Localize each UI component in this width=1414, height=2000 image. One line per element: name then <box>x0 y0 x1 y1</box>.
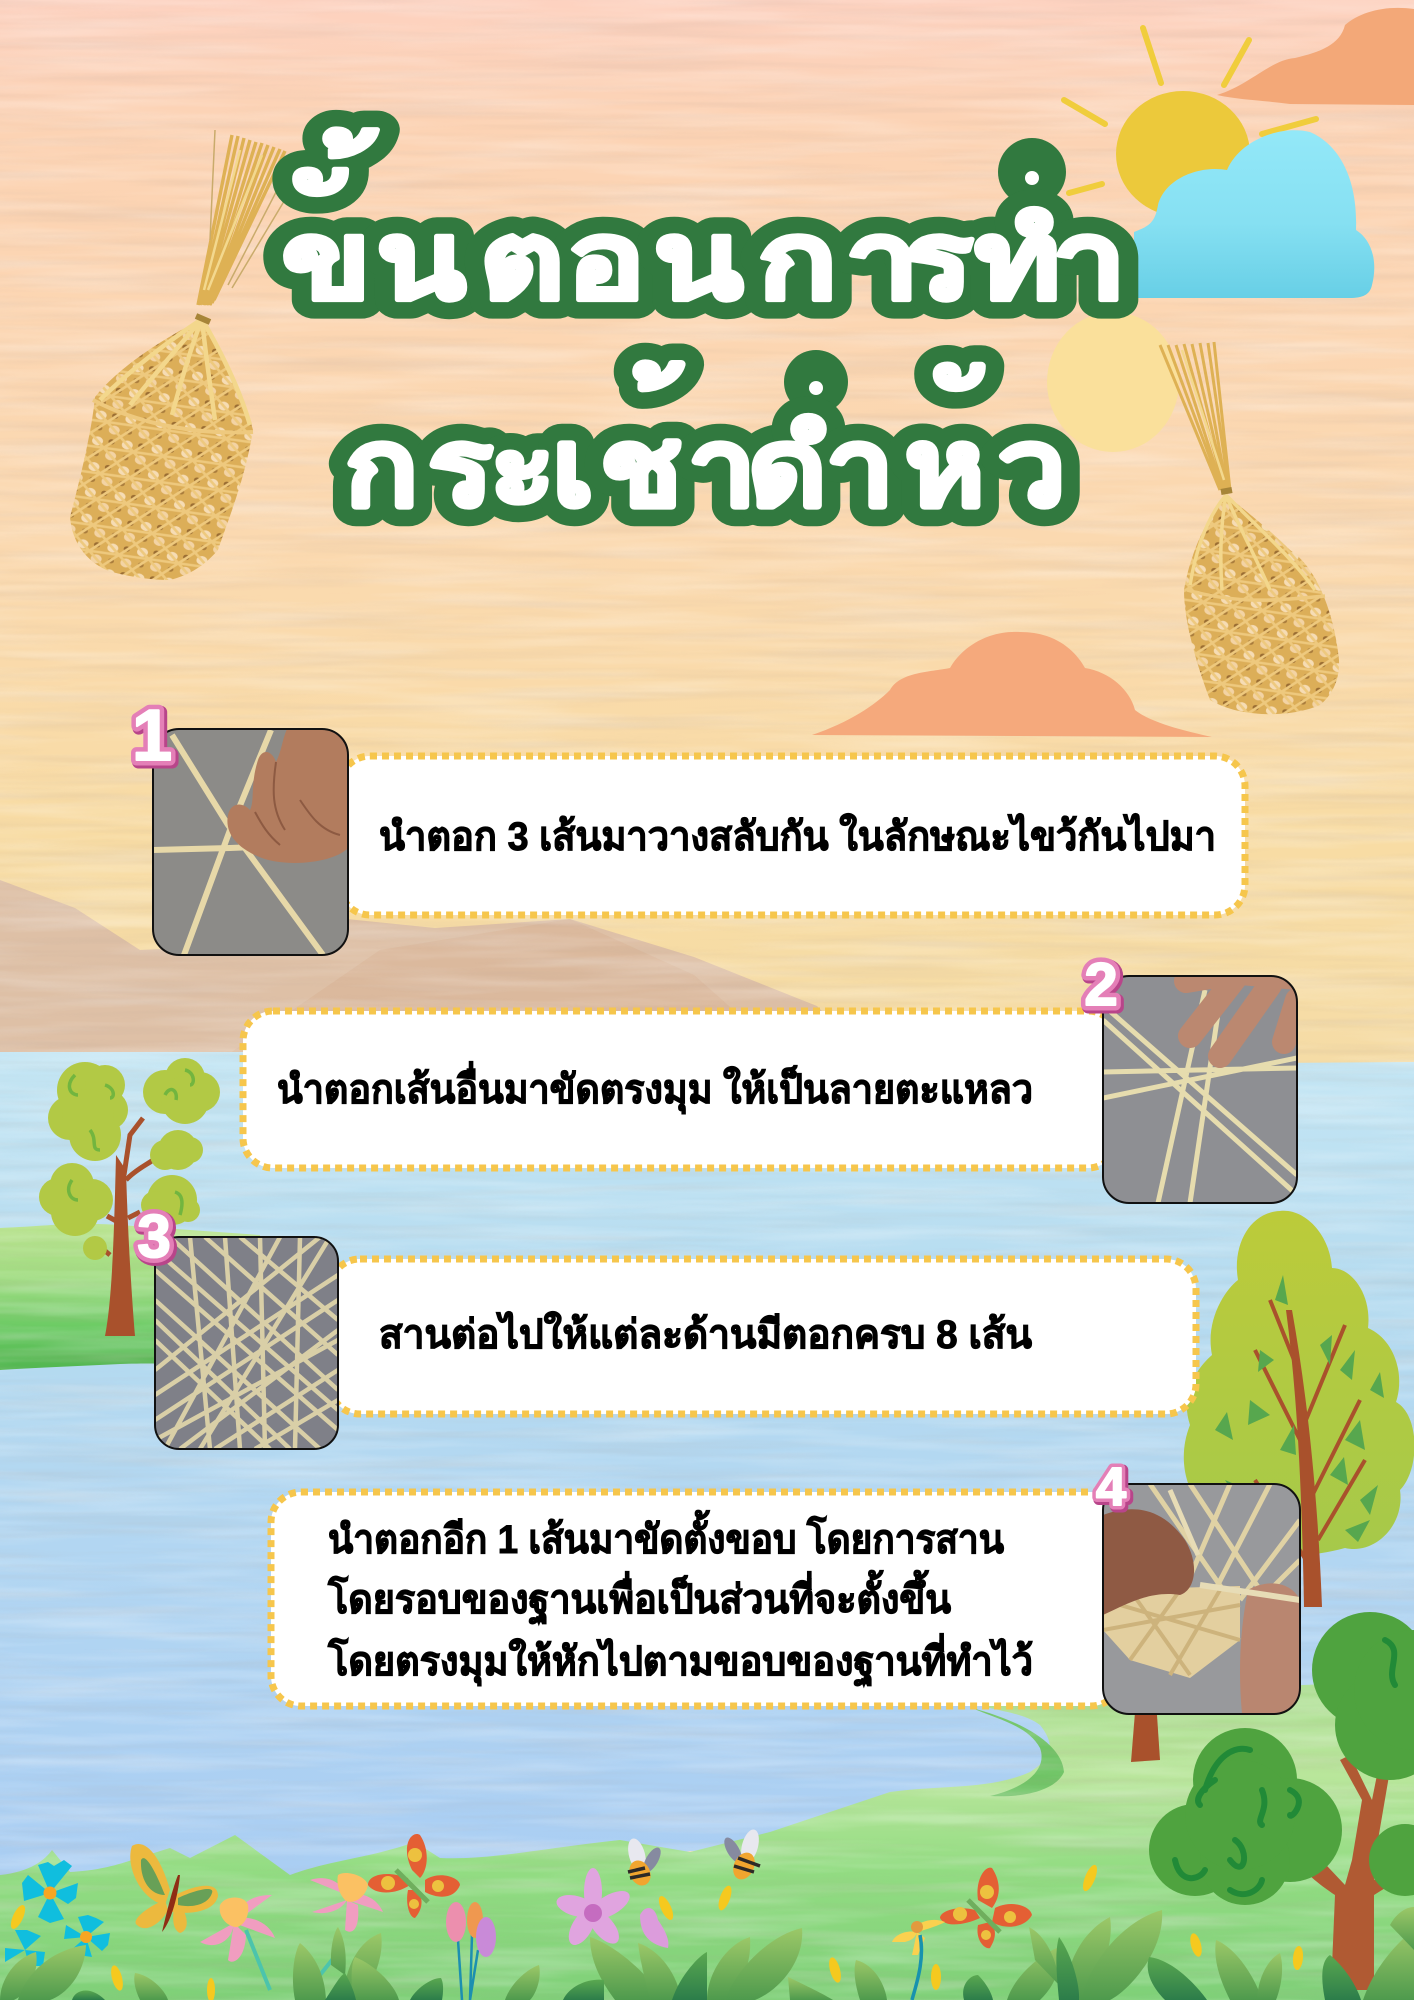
step 2 number badge: 2 <box>1084 951 1118 1018</box>
tree: bottom right trees <box>1149 1612 1414 1990</box>
step 2 text: นำตอกเส้นอื่นมาขัดตรงมุม ให้เป็นลายตะแหลว <box>277 1061 1033 1115</box>
icon: sun <box>1064 28 1316 217</box>
step 4 text <box>327 1510 1033 1688</box>
step 1 card <box>340 756 1245 915</box>
icon: bee left <box>625 1837 664 1889</box>
step 1 photo <box>153 729 348 955</box>
step 3 text: สานต่อไปให้แต่ละด้านมีตอกครบ 8 เส้น <box>379 1311 1032 1357</box>
step 4 text: โดยตรงมุมให้หักไปตามขอบของฐานที่ทำไว้ <box>327 1633 1033 1688</box>
title outline text: ขั้นตอนการทำ <box>282 129 1126 322</box>
step 3 number badge: 3 <box>139 1205 173 1272</box>
icon: orange cloud middle <box>812 632 1212 737</box>
step 3 panel <box>137 1203 1196 1449</box>
title white text <box>282 129 1126 529</box>
title outline text <box>282 129 1126 529</box>
step 3 number badge: 3 <box>137 1203 171 1270</box>
icon: orange butterfly 1 <box>368 1834 460 1918</box>
icon: tulips <box>446 1902 496 2000</box>
tree: small left tree <box>39 1058 220 1336</box>
step 3 card <box>330 1259 1196 1414</box>
step 4 panel <box>271 1457 1300 1714</box>
step 1 number badge: 1 <box>132 696 172 776</box>
tree trunk stub behind step 4 <box>1131 1700 1160 1762</box>
step 4 number badge: 4 <box>1096 1457 1126 1517</box>
background: sky <box>0 0 1414 1070</box>
icon: yellow daisy <box>892 1920 945 2000</box>
icon: blue flowers <box>5 1860 110 1966</box>
icon: pink flower 2 <box>300 1873 383 2000</box>
step 3 number badge: 3 <box>137 1203 171 1270</box>
title white text: กระเช้าดำหัว <box>345 361 1066 529</box>
step 4 number badge: 4 <box>1096 1457 1126 1517</box>
step 2 number badge: 2 <box>1084 951 1118 1018</box>
icon: yellow buds <box>8 1863 1304 2000</box>
background: lake edge brush <box>972 1708 1064 1796</box>
title ring dots <box>809 171 1039 395</box>
step 2 photo <box>1103 960 1297 1203</box>
step 1 text: นำตอก 3 เส้นมาวางสลับกัน ในลักษณะไขว้กันไปมา <box>379 813 1216 859</box>
step 4 number badge: 4 <box>1098 1459 1128 1519</box>
step 4 card <box>271 1492 1121 1706</box>
icon: right basket <box>1160 342 1339 714</box>
background: left grass bank <box>0 1224 260 1370</box>
bottom: flowers and insects <box>5 1828 1032 2000</box>
step 4 text: โดยรอบของฐานเพื่อเป็นส่วนที่จะตั้งขึ้น <box>327 1570 951 1626</box>
icon: blue cloud <box>1134 130 1374 298</box>
icon: purple flower <box>554 1868 634 1949</box>
icon: orange butterfly 2 <box>940 1868 1032 1948</box>
step 1 number badge: 1 <box>132 696 172 776</box>
title outline text: กระเช้าดำหัว <box>345 361 1066 529</box>
background: mountains <box>0 880 870 1060</box>
title white text: ขั้นตอนการทำ <box>282 129 1126 322</box>
tree: large right tree <box>1184 1211 1414 1607</box>
step 2 card <box>243 1011 1118 1168</box>
icon: orange cloud top right <box>1217 8 1414 105</box>
step 1 panel <box>132 696 1245 955</box>
step 4 text: นำตอกอีก 1 เส้นมาขัดตั้งขอบ โดยการสาน <box>328 1510 1004 1562</box>
icon: yellow butterfly <box>130 1844 218 1933</box>
step 1 number badge: 1 <box>134 698 174 778</box>
background: grass field <box>0 1680 1414 2000</box>
icon: pink flower 1 <box>200 1895 275 1990</box>
step 4 photo <box>1103 1484 1300 1714</box>
background: water <box>0 1052 1414 1900</box>
title <box>282 129 1126 529</box>
bottom: foreground leaves <box>0 1863 1414 2000</box>
step 3 photo <box>155 1237 338 1449</box>
step 2 panel <box>243 951 1297 1203</box>
step 2 number badge: 2 <box>1086 953 1120 1020</box>
icon: pale sun <box>1047 312 1179 452</box>
icon: small purple flower <box>640 1908 668 1948</box>
icon: bee right <box>721 1828 762 1883</box>
icon: left basket <box>70 130 298 580</box>
title outline bumps <box>784 138 1066 414</box>
